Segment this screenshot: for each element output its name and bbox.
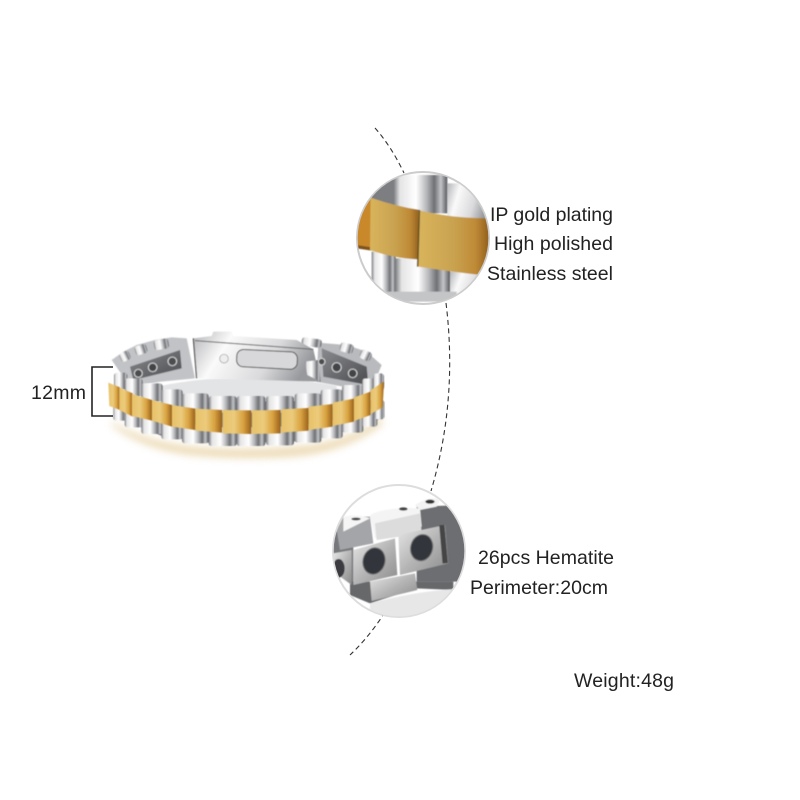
dashed connector arc	[350, 128, 450, 655]
upper silver links	[114, 373, 384, 413]
spec text: magnets and perimeter	[470, 547, 614, 599]
reflection under bracelet	[112, 417, 382, 458]
clasp links with hematite	[333, 498, 467, 618]
link detail	[357, 175, 491, 302]
spec text: material	[487, 204, 613, 285]
clasp	[193, 332, 321, 382]
spec text: magnets and perimeter: 26pcs Hematite	[478, 547, 614, 569]
width bracket	[92, 367, 113, 416]
lower silver links	[113, 400, 384, 446]
zoom circle: gold and steel links	[357, 172, 491, 304]
spec text: magnets and perimeter: Perimeter:20cm	[470, 577, 608, 599]
far side links with magnets	[112, 337, 382, 410]
gold centre links	[108, 382, 384, 434]
weight label: Weight:48g	[574, 670, 674, 692]
bracelet photo	[108, 332, 384, 458]
width label: 12mm	[31, 382, 86, 404]
infographic canvas	[32, 128, 673, 691]
zoom circle: magnets	[333, 485, 467, 618]
spec text: material: IP gold plating	[490, 204, 613, 226]
spec text: material: Stainless steel	[487, 263, 613, 285]
spec text: material: High polished	[494, 233, 613, 255]
